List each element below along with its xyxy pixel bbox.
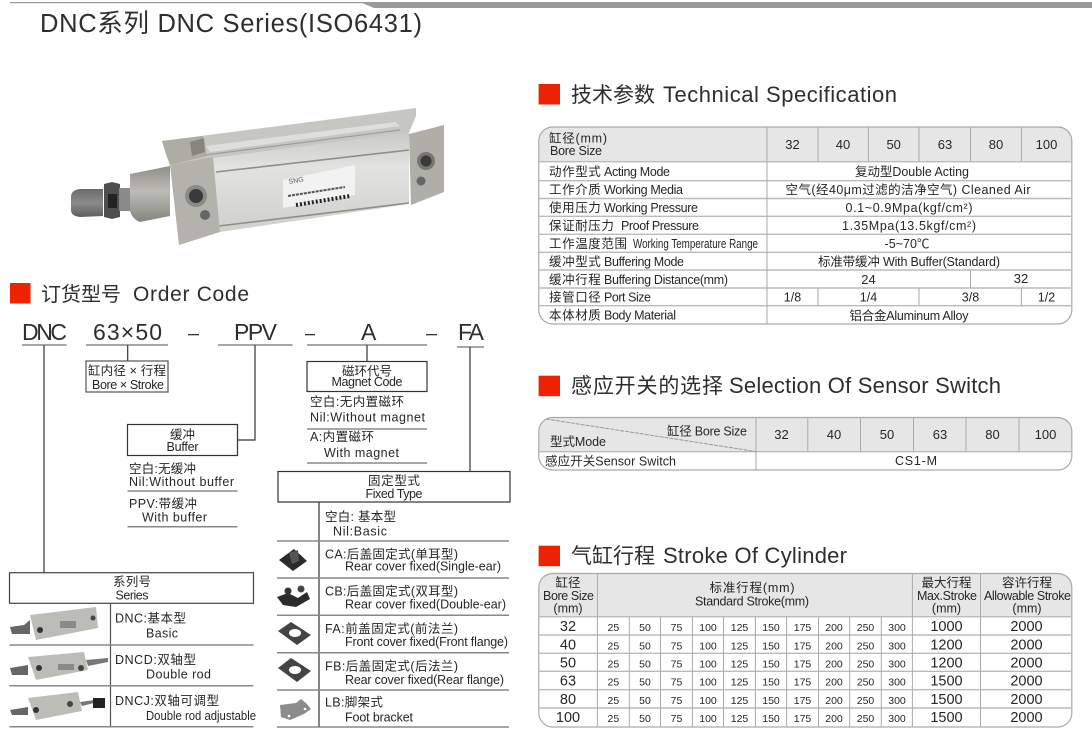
spec rows: labels: 使用压力 <box>549 200 601 215</box>
stroke row 100 <box>556 710 1043 726</box>
stroke row 80: 150 <box>762 695 780 707</box>
option: FB: Rear cover fixed(Rear flange) <box>345 673 504 687</box>
sensor table header: 80 <box>985 427 1000 442</box>
stroke table header: Allowable Stroke <box>984 589 1071 603</box>
buffer options: 空白:无缓冲 <box>129 461 196 476</box>
stroke row 63: 100 <box>699 676 717 688</box>
stroke row 32: 175 <box>794 622 811 634</box>
sensor table row: CS1-M <box>895 454 937 468</box>
heading: stroke of cylinder <box>539 543 847 568</box>
series row: DNCD: DNCD:双轴型 <box>115 652 196 667</box>
top header rule <box>10 2 1092 8</box>
stroke row 40: 2000 <box>1010 638 1043 654</box>
stroke row 40: 1200 <box>930 638 963 654</box>
box: magnet code <box>307 362 427 392</box>
code string: DNC <box>22 319 67 345</box>
stroke row 50: 50 <box>639 658 651 670</box>
stroke row 80: 200 <box>825 695 843 707</box>
heading: sensor switch: Selection Of Sensor Switch <box>729 373 1001 398</box>
spec rows: values: 1/8 <box>784 290 801 304</box>
title: DNC系列 DNC Series(ISO6431) <box>40 10 422 38</box>
series row: DNCJ <box>10 692 256 723</box>
spec rows: values: 标准带缓冲 With Buffer(Standard) <box>818 254 1000 269</box>
spec rows: values: 32 <box>1014 271 1028 286</box>
spec table header: 80 <box>989 137 1003 152</box>
spec rows: values: 1/4 <box>860 290 877 304</box>
option: FA: FA:前盖固定式(前法兰) <box>325 621 458 636</box>
spec rows: labels: Buffering Distance(mm) <box>604 273 728 287</box>
spec rows: labels: Body Material <box>604 308 676 322</box>
stroke row 100: 250 <box>857 713 874 725</box>
stroke row 63: 200 <box>825 676 843 688</box>
stroke row 32: 150 <box>762 622 780 634</box>
heading: technical specification: 技术参数 <box>571 84 655 107</box>
panel: sensor switch <box>539 373 1072 470</box>
option: LB: LB:脚架式 <box>325 695 383 710</box>
code string: 63×50 <box>93 319 162 345</box>
stroke row 32: 2000 <box>1010 619 1043 635</box>
sensor table row <box>545 454 937 468</box>
stroke row 63: 300 <box>888 676 906 688</box>
stroke row 80: 50 <box>639 695 651 707</box>
stroke row 100: 50 <box>639 713 651 725</box>
spec table header: 100 <box>1036 137 1057 152</box>
series row: DNCJ: DNCJ:双轴可调型 <box>115 693 219 708</box>
stroke row 63: 150 <box>762 676 780 688</box>
heading: technical specification: Technical Specification <box>663 82 897 107</box>
series row: DNC <box>10 607 186 640</box>
stroke row 100: 1500 <box>930 710 963 726</box>
product photo: cylinder <box>71 108 444 245</box>
sensor table header: 型式Mode <box>550 435 606 449</box>
sensor table header: 32 <box>774 427 789 442</box>
stroke row 40: 50 <box>639 640 651 652</box>
magnet options: 空白:无内置磁环 <box>310 394 404 409</box>
box: buffer: Buffer <box>166 440 198 454</box>
stroke row 40: 75 <box>671 640 682 652</box>
stroke row 32: 200 <box>825 622 843 634</box>
stroke table header <box>543 575 1071 616</box>
code string <box>22 319 485 345</box>
stroke row 32: 1000 <box>930 619 963 635</box>
box: series <box>10 573 254 603</box>
option: CA <box>279 546 501 573</box>
stroke row 100: 100 <box>699 713 717 725</box>
box: series: Series <box>116 588 148 602</box>
stroke table header: (mm) <box>553 602 583 616</box>
box: magnet code: Magnet Code <box>332 375 403 389</box>
stroke row 100: 75 <box>671 713 682 725</box>
sensor table header: 40 <box>827 427 841 442</box>
stroke row 100: 2000 <box>1010 710 1043 726</box>
spec table header: 32 <box>785 137 800 152</box>
panel: stroke of cylinder <box>539 543 1072 727</box>
spec rows: labels: Acting Mode <box>604 165 670 179</box>
stroke row 32: 25 <box>608 622 619 634</box>
heading: order code: Order Code <box>133 283 249 306</box>
box: bore x stroke <box>86 361 168 392</box>
option: CA: CA:后盖固定式(单耳型) <box>325 546 458 561</box>
option: LB <box>280 695 414 725</box>
stroke row 50: 200 <box>825 658 843 670</box>
heading: technical specification <box>539 82 897 107</box>
option: FA <box>278 621 508 649</box>
spec rows: values: 0.1~0.9Mpa(kgf/cm²) <box>846 201 972 215</box>
stroke row 80: 125 <box>731 695 748 707</box>
spec table header: 63 <box>938 137 952 152</box>
spec rows: values <box>784 165 1055 323</box>
stroke row 100: 150 <box>762 713 780 725</box>
series row: DNCJ: Double rod adjustable <box>146 709 256 723</box>
stroke row 100: 300 <box>888 713 906 725</box>
spec rows: labels: Buffering Mode <box>604 255 684 269</box>
spec table <box>539 127 1072 324</box>
spec rows: labels: Working Media <box>604 183 683 197</box>
stroke row 32: 32 <box>560 619 576 635</box>
panel: order code <box>10 283 510 727</box>
spec rows: values: 24 <box>861 272 876 287</box>
box: fixed type: Fixed Type <box>366 487 423 501</box>
stroke row 40: 250 <box>857 640 874 652</box>
spec rows: labels: 接管口径 <box>549 290 601 304</box>
stroke row 32: 50 <box>639 622 651 634</box>
stroke row 63: 250 <box>857 676 874 688</box>
stroke row 80: 1500 <box>930 692 963 708</box>
sensor table header <box>550 424 1056 449</box>
spec rows: values: 铝合金Aluminum Alloy <box>850 308 969 323</box>
stroke table header: 标准行程(mm) <box>710 580 794 595</box>
box: fixed type <box>278 472 510 502</box>
code string: FA <box>458 319 485 345</box>
stroke row 50: 100 <box>699 658 717 670</box>
series row: DNCD <box>10 652 211 681</box>
option: LB: Foot bracket <box>345 711 414 725</box>
stroke table header: Standard Stroke(mm) <box>695 595 809 609</box>
stroke row 40: 175 <box>794 640 811 652</box>
stroke row 63: 2000 <box>1010 674 1043 690</box>
stroke row 32: 125 <box>731 622 748 634</box>
stroke table header: Bore Size <box>543 589 594 603</box>
box: series: 系列号 <box>113 575 151 589</box>
spec table header: 缸径(mm) <box>549 131 607 146</box>
product photo: cylinder: SNG <box>288 176 304 186</box>
stroke row 50: 2000 <box>1010 656 1043 672</box>
stroke table header: 缸径 <box>555 575 581 590</box>
option: basic: 空白: 基本型 <box>325 509 396 524</box>
box: bore x stroke: 缸内径 × 行程 <box>88 363 166 378</box>
option: FB <box>278 658 504 687</box>
stroke row 63: 75 <box>671 676 682 688</box>
stroke row 80: 175 <box>794 695 811 707</box>
spec rows: labels: 缓冲行程 <box>549 272 601 287</box>
stroke row 100: 100 <box>556 710 580 726</box>
spec rows: labels: 工作介质 <box>549 183 601 197</box>
stroke row 100: 125 <box>731 713 748 725</box>
stroke row 80: 2000 <box>1010 692 1043 708</box>
spec rows: labels: Working Pressure <box>604 201 698 215</box>
stroke row 80: 250 <box>857 695 874 707</box>
stroke row 40 <box>560 638 1043 654</box>
spec rows: labels: 缓冲型式 <box>549 254 601 269</box>
stroke table <box>539 574 1072 727</box>
buffer options <box>128 461 238 527</box>
option: CB: CB:后盖固定式(双耳型) <box>325 584 458 599</box>
heading: stroke of cylinder: 气缸行程 <box>571 545 655 568</box>
spec rows: values: 1/2 <box>1038 290 1055 304</box>
buffer options: PPV:带缓冲 <box>129 496 197 511</box>
magnet options <box>307 394 427 463</box>
stroke table header: (mm) <box>932 602 961 616</box>
stroke row 100: 200 <box>825 713 843 725</box>
stroke row 50: 50 <box>560 656 576 672</box>
stroke row 63: 125 <box>731 676 748 688</box>
buffer options: Nil:Without buffer <box>129 475 234 489</box>
sensor table header: 50 <box>880 427 894 442</box>
heading: sensor switch: 感应开关的选择 <box>571 375 723 398</box>
heading: order code: 订货型号 <box>41 283 121 306</box>
heading: stroke of cylinder: Stroke Of Cylinder <box>663 543 847 568</box>
spec rows: labels: Working Temperature Range <box>633 237 758 251</box>
stroke row 63: 25 <box>608 676 619 688</box>
option: CA: Rear cover fixed(Single-ear) <box>345 559 501 573</box>
stroke table header: 容许行程 <box>1002 575 1052 590</box>
stroke row 40: 100 <box>699 640 717 652</box>
stroke row 63 <box>560 674 1043 690</box>
spec rows: labels: 保证耐压力 <box>549 219 615 233</box>
sensor table <box>539 418 1072 470</box>
spec rows: values: 3/8 <box>962 290 979 304</box>
stroke row 63: 50 <box>639 676 651 688</box>
spec rows: labels: Port Size <box>604 290 651 304</box>
panel: technical specification <box>539 82 1072 324</box>
spec rows: labels: 工作温度范围 <box>549 236 628 251</box>
option: FB: FB:后盖固定式(后法兰) <box>325 658 458 673</box>
stroke row 63: 63 <box>560 674 576 690</box>
magnet options: Nil:Without magnet <box>310 411 426 425</box>
spec rows: values: -5~70℃ <box>884 237 930 251</box>
stroke row 40: 300 <box>888 640 906 652</box>
stroke row 50: 150 <box>762 658 780 670</box>
magnet options: With magnet <box>324 446 400 460</box>
series row: DNC: Basic <box>146 626 178 640</box>
spec table header <box>549 131 1057 158</box>
option: basic <box>325 509 396 539</box>
series row: DNC: DNC:基本型 <box>115 612 186 626</box>
stroke row 50 <box>560 656 1043 672</box>
spec table header: 40 <box>836 137 850 152</box>
spec rows: labels: 本体材质 <box>549 308 601 322</box>
stroke row 63: 175 <box>794 676 811 688</box>
stroke row 32: 250 <box>857 622 874 634</box>
spec rows: labels: Proof Pressure <box>621 219 699 233</box>
stroke row 80: 80 <box>560 692 576 708</box>
stroke row 50: 300 <box>888 658 906 670</box>
connector lines <box>22 345 484 573</box>
spec rows: labels: 动作型式 <box>549 165 601 179</box>
sensor table header: 缸径 Bore Size <box>667 424 747 439</box>
stroke row 40: 40 <box>560 638 576 654</box>
option: FA: Front cover fixed(Front flange) <box>345 635 508 649</box>
series row: DNCD: Double rod <box>146 667 211 681</box>
stroke row 100: 175 <box>794 713 811 725</box>
panel: fixed type <box>277 472 510 727</box>
sensor table header: 100 <box>1035 427 1056 442</box>
spec table header: Bore Size <box>550 144 602 158</box>
sensor table header: 63 <box>933 427 947 442</box>
spec rows: values: 复动型Double Acting <box>855 165 969 179</box>
panel: series <box>10 573 256 727</box>
code string: A <box>361 319 377 345</box>
spec rows: labels <box>549 165 758 322</box>
stroke row 32: 75 <box>671 622 682 634</box>
stroke row 50: 1200 <box>930 656 963 672</box>
stroke row 80 <box>560 692 1043 708</box>
stroke row 40: 125 <box>731 640 748 652</box>
box: fixed type: 固定型式 <box>368 473 420 488</box>
stroke row 80: 100 <box>699 695 717 707</box>
option: basic: Nil:Basic <box>333 525 387 539</box>
stroke row 40: 25 <box>608 640 619 652</box>
stroke row 80: 300 <box>888 695 906 707</box>
heading: order code <box>10 283 249 306</box>
stroke row 80: 25 <box>608 695 619 707</box>
stroke row 80: 75 <box>671 695 682 707</box>
stroke row 100: 25 <box>608 713 619 725</box>
sensor table row: 感应开关Sensor Switch <box>545 454 676 468</box>
code string: PPV <box>234 319 278 345</box>
stroke row 40: 200 <box>825 640 843 652</box>
stroke row 63: 1500 <box>930 674 963 690</box>
stroke table header: (mm) <box>1012 602 1042 616</box>
stroke row 50: 125 <box>731 658 748 670</box>
stroke table header: Max.Stroke <box>917 589 977 603</box>
stroke row 50: 75 <box>671 658 682 670</box>
stroke row 32: 300 <box>888 622 906 634</box>
box: bore x stroke: Bore × Stroke <box>92 378 164 392</box>
stroke row 40: 150 <box>762 640 780 652</box>
stroke row 50: 25 <box>608 658 619 670</box>
spec rows: values: 空气(经40μm过滤的洁净空气) Cleaned Air <box>786 182 1030 197</box>
stroke table header: 最大行程 <box>922 575 972 590</box>
option: CB <box>277 584 506 612</box>
stroke row 32 <box>560 619 1043 635</box>
stroke row 50: 175 <box>794 658 811 670</box>
stroke row 50: 250 <box>857 658 874 670</box>
option: CB: Rear cover fixed(Double-ear) <box>345 598 506 612</box>
spec table header: 50 <box>886 137 901 152</box>
spec rows: values: 1.35Mpa(13.5kgf/cm²) <box>842 219 976 233</box>
heading: sensor switch <box>539 373 1001 398</box>
box: magnet code: 磁环代号 <box>342 364 392 379</box>
buffer options: With buffer <box>142 511 207 525</box>
box: buffer <box>128 424 238 456</box>
stroke row 32: 100 <box>699 622 717 634</box>
box: buffer: 缓冲 <box>170 427 195 442</box>
magnet options: A:内置磁环 <box>310 429 374 444</box>
